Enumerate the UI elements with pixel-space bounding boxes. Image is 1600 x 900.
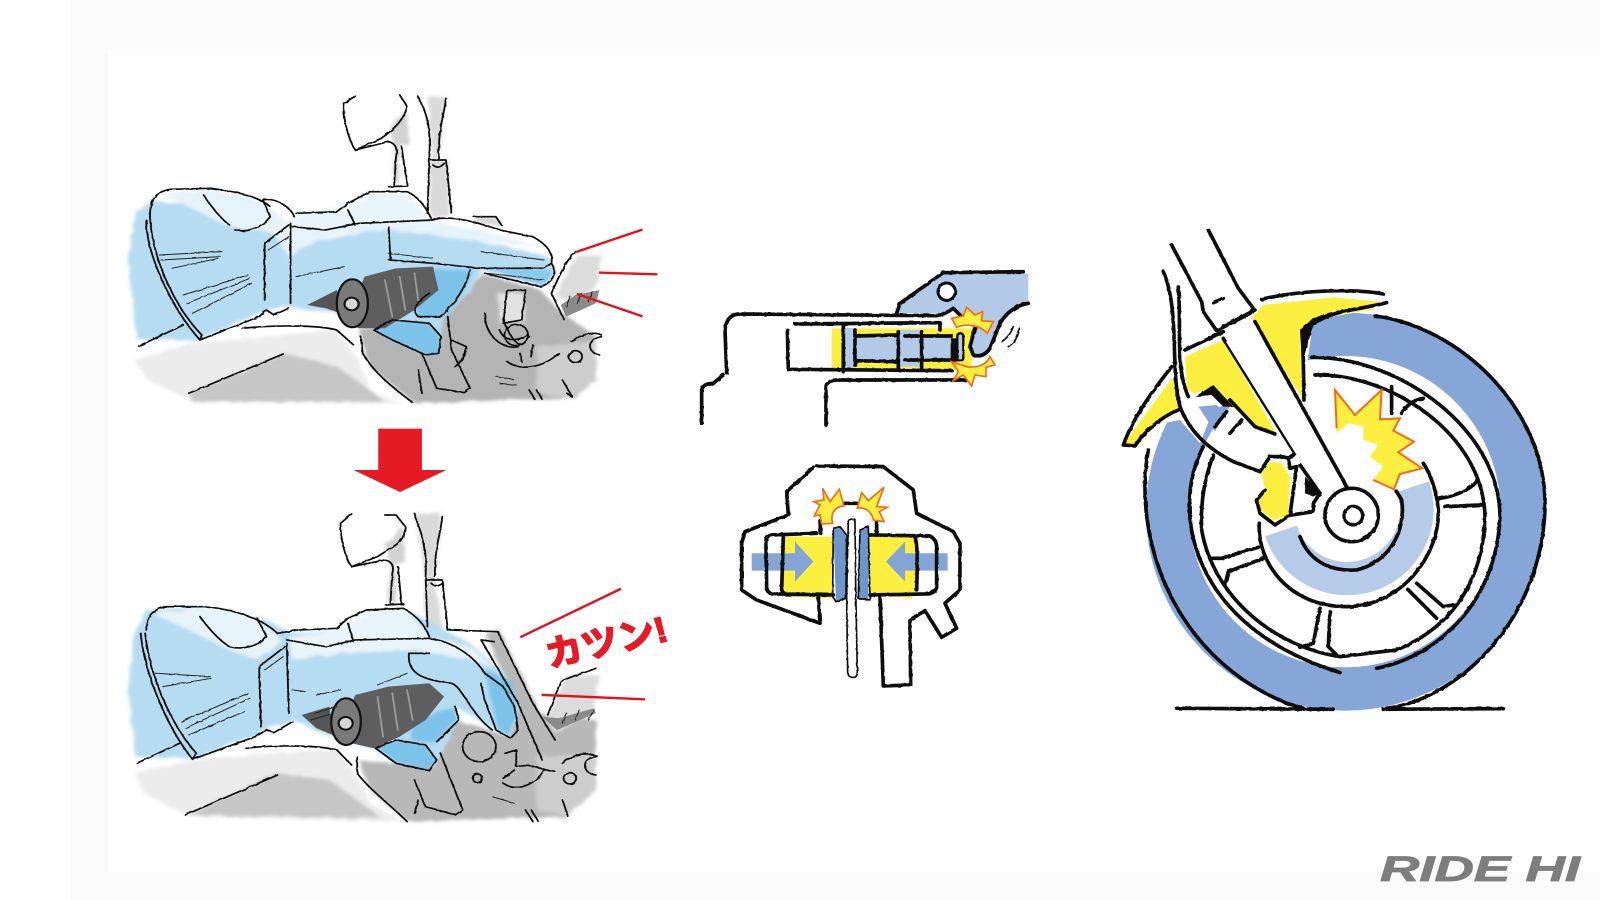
tire blue ring <box>1168 334 1522 689</box>
disc rotor wash <box>1281 487 1417 579</box>
small blue patch behind fender <box>1198 405 1225 432</box>
glove and controls line art <box>139 95 601 403</box>
diagram line art <box>702 272 1028 425</box>
glove and controls line art <box>137 513 598 822</box>
grey washes of the tank and controls <box>135 97 601 403</box>
piston blue fill <box>843 327 952 372</box>
caliper line art <box>742 466 960 686</box>
impact sparks on lever <box>952 307 995 386</box>
handlebar grip <box>302 683 444 748</box>
red arrow between the two hands <box>353 429 446 492</box>
area masked behind fender and fork <box>1133 277 1370 443</box>
brake impact spark <box>1335 390 1422 489</box>
caliper pistons and arrows <box>752 527 948 602</box>
red motion lines <box>577 230 656 316</box>
caliper yellow pads <box>782 535 918 598</box>
fork tube white overlay <box>1226 325 1340 483</box>
lever blue fill <box>897 273 1028 355</box>
illustration: front wheel with brake <box>1123 230 1545 709</box>
red impact lines <box>521 589 644 699</box>
diagram: master cylinder pushed by lever <box>702 272 1028 686</box>
illustration: hand squeezing the brake lever <box>128 429 672 822</box>
impact sparks on caliper <box>814 487 887 524</box>
blue glove wash <box>128 190 556 355</box>
illustration: hand resting on the brake lever <box>128 95 656 403</box>
blue glove wash <box>128 607 518 771</box>
handlebar grip <box>307 267 439 328</box>
grey washes <box>135 513 600 822</box>
logo: RIDE HI: RIDE HI <box>1380 850 1582 889</box>
lever pivot hatching <box>542 708 596 730</box>
wheel line art <box>1123 230 1545 709</box>
cylinder yellow fluid <box>832 328 972 370</box>
fender yellow <box>1123 297 1380 520</box>
lever pivot hatching <box>561 290 600 317</box>
sound effect: katsun: カツン! <box>541 609 672 675</box>
